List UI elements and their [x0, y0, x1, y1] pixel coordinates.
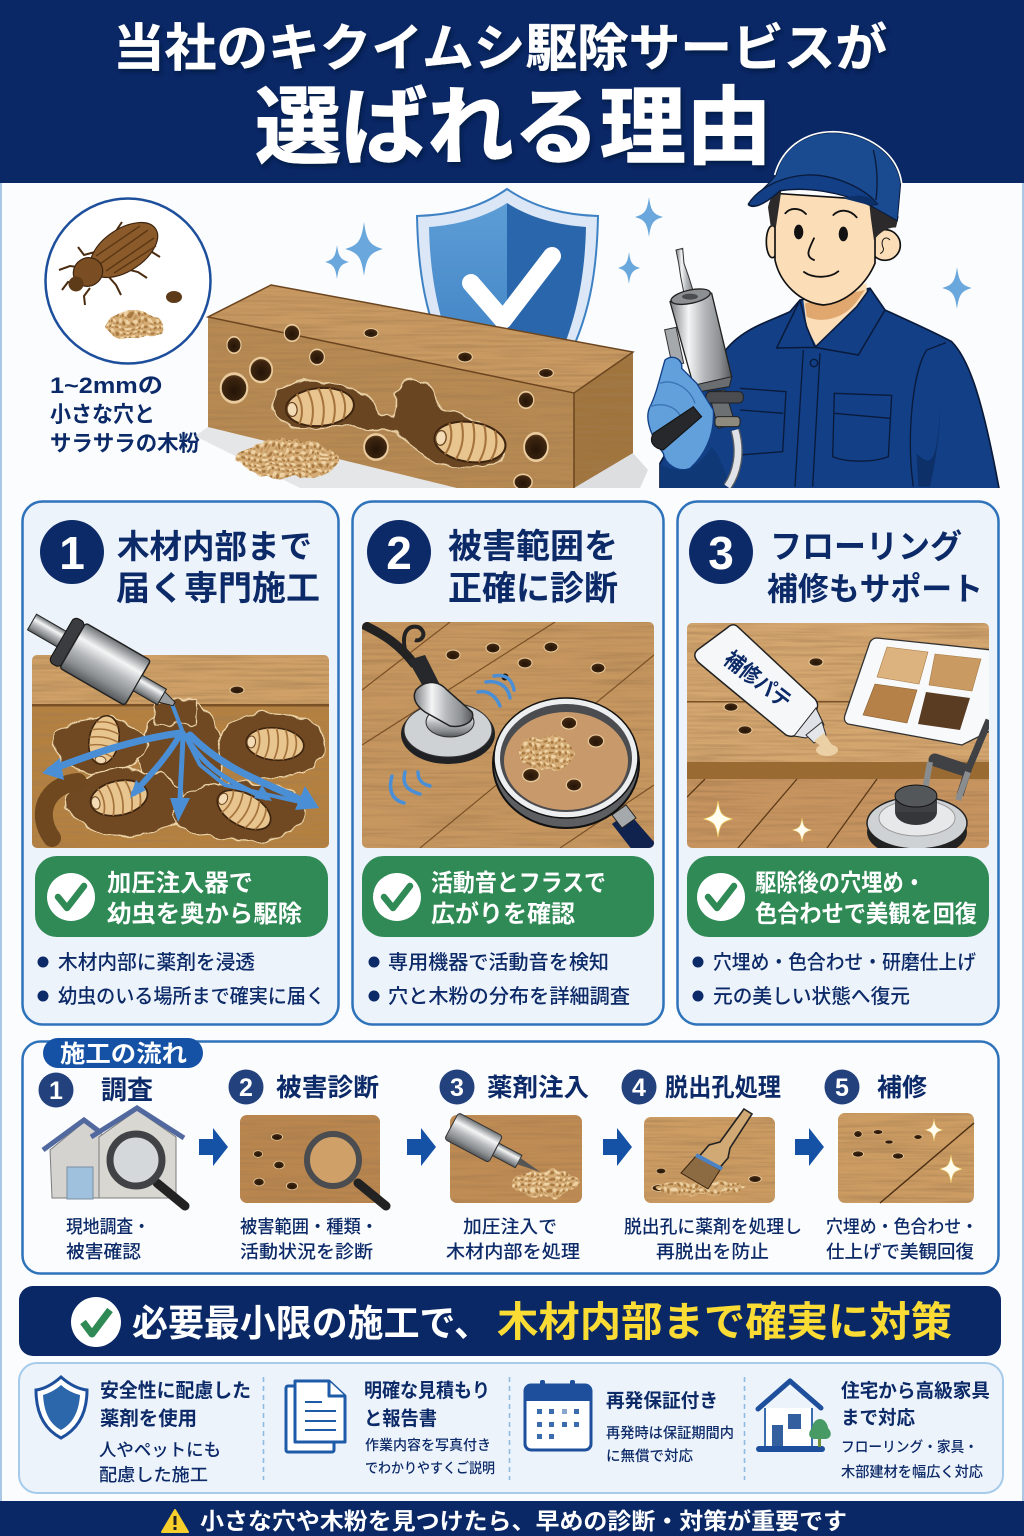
callout: green summary 1 [35, 856, 328, 937]
title line 2: 選ばれる理由 [255, 81, 772, 176]
frass pellet [166, 291, 182, 303]
step 2 diagnosis: 活動状況を診断 [240, 1242, 373, 1262]
assurance 2 estimate and report [286, 1380, 495, 1476]
glints [704, 801, 812, 842]
frass pile [104, 312, 164, 340]
text: hole size caption: 1~2mmの [50, 373, 163, 398]
header band with title [0, 0, 1024, 183]
panel: service 3 [678, 502, 998, 1024]
blue treatment jets [50, 704, 310, 808]
arrow 4 [795, 1128, 824, 1166]
heading 2 [448, 528, 618, 608]
assurance 3 warranty [525, 1380, 734, 1465]
assurance 1 safety [36, 1377, 251, 1485]
banner: key message [19, 1286, 1001, 1356]
icon: warning triangle [162, 1510, 188, 1532]
frass pile [238, 441, 338, 479]
step 1 survey: 1 [49, 1077, 63, 1105]
step 1 survey: 被害確認 [66, 1242, 141, 1262]
callout: green summary 2: 活動音とフラスで [431, 870, 606, 897]
step 3 injection: 薬剤注入 [487, 1074, 589, 1102]
heading 1: 届く専門施工 [116, 570, 320, 608]
cap [748, 133, 901, 221]
step 5 repair: 補修 [877, 1074, 927, 1102]
collar [777, 288, 885, 355]
bullets 3: 元の美しい状態へ復元 [713, 985, 910, 1008]
number badge 2 [367, 520, 431, 584]
banner: key message: 必要最小限の施工で、 [132, 1303, 490, 1344]
colour swatch card [844, 638, 992, 745]
step 4 exit-hole treatment: 4 [632, 1074, 646, 1102]
step 2 diagnosis: 被害範囲・種類・ [240, 1217, 378, 1237]
assurance 3 warranty: に無償で対応 [606, 1448, 693, 1465]
assurance 4 coverage: フローリング・家具・ [841, 1439, 978, 1456]
panel: service 2 [352, 502, 664, 1024]
floor sander [867, 720, 989, 858]
assurance 3 warranty: 再発保証付き [606, 1390, 718, 1412]
injector [19, 599, 187, 727]
wood block with larvae [195, 285, 648, 490]
assurance 3 warranty: 再発時は保証期間内 [606, 1425, 734, 1442]
heading 1: 木材内部まで [117, 528, 312, 565]
image: injector into wood cross-section [19, 599, 329, 848]
icon: house with magnifier [43, 1108, 185, 1206]
image: wood with magnifier [240, 1115, 386, 1206]
heading 3 [767, 528, 983, 607]
heading 3: 補修もサポート [767, 571, 983, 607]
callout: green summary 3: 色合わせで美観を回復 [755, 901, 977, 928]
callout: green summary 2 [362, 856, 654, 937]
callout: green summary 3 [687, 856, 989, 937]
text: hole size caption [50, 373, 200, 456]
panel: magnified beetle circle [46, 198, 210, 364]
shirt placket and pockets [740, 350, 892, 487]
assurance 2 estimate and report: でわかりやすくご説明 [365, 1460, 495, 1476]
glove [648, 357, 713, 470]
ears [876, 229, 902, 262]
bullets 3: 穴埋め・色合わせ・研磨仕上げ [713, 951, 976, 974]
assurance 4 coverage: 木部建材を幅広く対応 [841, 1464, 983, 1481]
uniform [660, 288, 999, 490]
arrow 3 [603, 1128, 632, 1166]
icon: house and tree [756, 1381, 831, 1452]
heading 2: 正確に診断 [448, 570, 618, 608]
text: hole size caption: サラサラの木粉 [50, 431, 200, 456]
bullets 1: 幼虫のいる場所まで確実に届く [58, 985, 325, 1008]
image: stethoscope and magnifier on floor [362, 622, 654, 860]
tool grip [651, 407, 702, 450]
panel: construction flow [22, 1038, 998, 1274]
face [775, 193, 875, 305]
heading 2: 被害範囲を [448, 528, 618, 566]
callout: green summary 2: 広がりを確認 [431, 900, 575, 928]
bullets 1: 木材内部に薬剤を浸透 [58, 951, 255, 974]
number badge 1: 1 [59, 527, 85, 579]
number badge 3: 3 [708, 527, 734, 579]
step 2 diagnosis [228, 1070, 386, 1262]
step 3 injection: 3 [450, 1074, 464, 1102]
exit holes [221, 325, 553, 490]
hero illustration [46, 132, 999, 490]
number badge 3 [689, 520, 753, 584]
step 1 survey: 調査 [101, 1075, 153, 1105]
icon: calendar [525, 1380, 591, 1450]
step 5 repair: 5 [835, 1074, 849, 1102]
heading 3: フローリング [770, 528, 962, 565]
callout: green summary 3: 駆除後の穴埋め・ [755, 870, 925, 897]
assurance 4 coverage: 住宅から高級家具 [841, 1380, 990, 1402]
flow tag [43, 1038, 203, 1068]
icon: powderpost beetle [58, 222, 160, 306]
step 4 exit-hole treatment: 脱出孔処理 [665, 1074, 781, 1102]
bullets 1 [38, 951, 325, 1008]
step 4 exit-hole treatment: 脱出孔に薬剤を処理し [624, 1217, 802, 1237]
image: injector on wood [444, 1113, 582, 1203]
neck [803, 283, 867, 347]
assurance 1 safety: 配慮した施工 [99, 1465, 208, 1485]
stethoscope [362, 624, 495, 764]
image: repaired wood [838, 1113, 974, 1203]
step 3 injection: 加圧注入で [463, 1217, 557, 1237]
putty tube [695, 625, 838, 756]
panel: service 1 [19, 502, 338, 1024]
icon: shield with check [416, 188, 599, 341]
sparkles [325, 197, 972, 309]
step 3 injection [440, 1070, 589, 1262]
callout: green summary 1: 加圧注入器で [107, 870, 253, 897]
step 5 repair: 穴埋め・色合わせ・ [826, 1217, 978, 1237]
image: repair putty, swatches and sander [687, 623, 992, 858]
panel: four assurances [19, 1363, 1003, 1493]
bullets 3 [692, 951, 976, 1008]
icon: shield [36, 1377, 87, 1438]
worker illustration [648, 132, 999, 490]
hair [768, 188, 899, 241]
footer warning bar: 小さな穴や木粉を見つけたら、早めの診断・対策が重要です [200, 1508, 847, 1534]
assurance 1 safety: 薬剤を使用 [100, 1408, 197, 1430]
assurance 1 safety: 人やペットにも [99, 1440, 221, 1460]
magnifier [493, 698, 654, 860]
text: hole size caption: 小さな穴と [50, 402, 155, 427]
facial features [794, 225, 803, 239]
step 3 injection: 木材内部を処理 [446, 1242, 580, 1262]
callout: green summary 1: 幼虫を奥から駆除 [107, 901, 302, 928]
step 1 survey: 現地調査・ [66, 1217, 150, 1237]
step 2 diagnosis: 2 [239, 1074, 253, 1102]
title line 1: 当社のキクイムシ駆除サービスが [113, 20, 887, 77]
assurance 2 estimate and report: と報告書 [364, 1407, 437, 1430]
arrow 1 [199, 1128, 228, 1166]
bullets 2: 専用機器で活動音を検知 [388, 951, 609, 974]
assurance 1 safety: 安全性に配慮した [100, 1380, 251, 1402]
injector tool [665, 248, 743, 428]
footer warning bar [0, 1501, 1024, 1536]
number badge 1 [40, 520, 104, 584]
arrow 2 [407, 1128, 436, 1166]
hose [727, 430, 738, 487]
bullets 2: 穴と木粉の分布を詳細調査 [388, 985, 630, 1008]
step 1 survey [38, 1072, 185, 1262]
bullets 2 [368, 951, 630, 1008]
assurance 2 estimate and report: 作業内容を写真付き [365, 1437, 491, 1453]
larva cavities [270, 380, 508, 468]
assurance 2 estimate and report: 明確な見積もり [364, 1380, 490, 1402]
putty tube: 補修パテ [719, 646, 796, 714]
assurance 4 coverage [756, 1380, 990, 1481]
number badge 2: 2 [386, 527, 412, 579]
step 4 exit-hole treatment [622, 1070, 802, 1262]
banner: key message: 木材内部まで確実に対策 [497, 1299, 952, 1345]
step 5 repair [824, 1070, 978, 1262]
icon: documents [286, 1381, 345, 1452]
step 2 diagnosis: 被害診断 [276, 1074, 379, 1102]
step 5 repair: 仕上げで美観回復 [826, 1242, 974, 1262]
sound waves [390, 676, 514, 803]
assurance 4 coverage: まで対応 [841, 1407, 915, 1429]
step 4 exit-hole treatment: 再脱出を防止 [656, 1242, 769, 1262]
image: brush on wood [644, 1109, 775, 1203]
heading 1 [116, 528, 320, 608]
flow tag: 施工の流れ [60, 1041, 187, 1068]
